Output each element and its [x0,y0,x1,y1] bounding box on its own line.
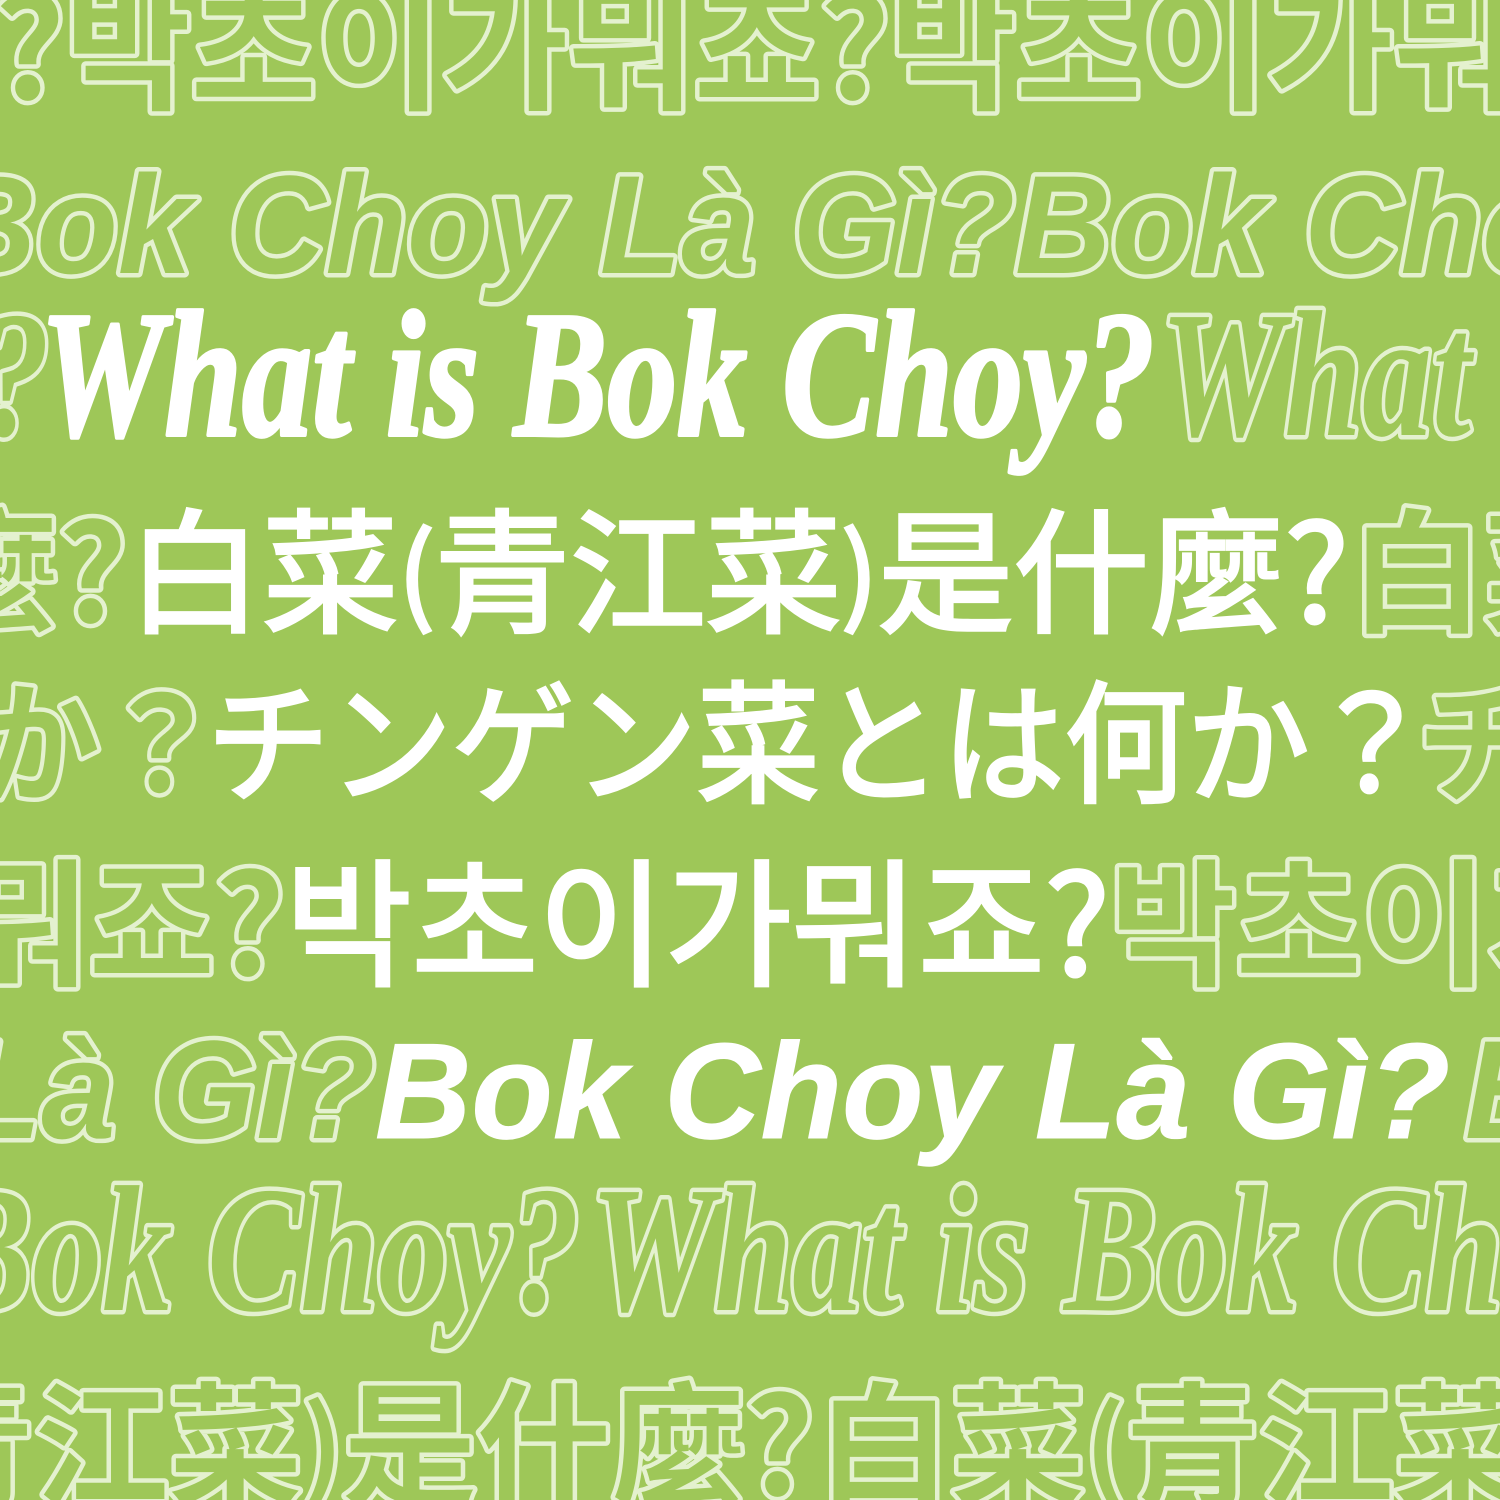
heading: Japanese: チンゲン菜とは何か？ [207,640,1432,831]
heading: Chinese: 是什麼? [878,467,1349,661]
heading: Chinese: ) [842,489,878,643]
row 4 pattern: Chinese outlined [0,467,1500,661]
heading: Korean: 박초이가뭐죠? [285,815,1110,1015]
row 3 pattern: English script outlined [0,275,1500,474]
row 9: Chinese outlined pattern [0,1340,1500,1500]
heading: Chinese: 白菜 [127,467,395,661]
title: What is Bok Choy?: What is Bok Choy? [40,275,1155,474]
row 6 pattern: Korean outlined [0,815,1500,1015]
heading: Chinese: 青江菜 [435,467,842,661]
row 8: English script outlined pattern [0,1150,1500,1349]
heading: Vietnamese: Bok Choy Là Gì? [375,1015,1450,1167]
heading: Chinese: ( [398,489,435,643]
row 7 pattern: Vietnamese outlined [0,1011,1500,1168]
row 5 pattern: Japanese outlined [0,640,1500,831]
row 1: Korean outlined pattern [0,0,1500,139]
